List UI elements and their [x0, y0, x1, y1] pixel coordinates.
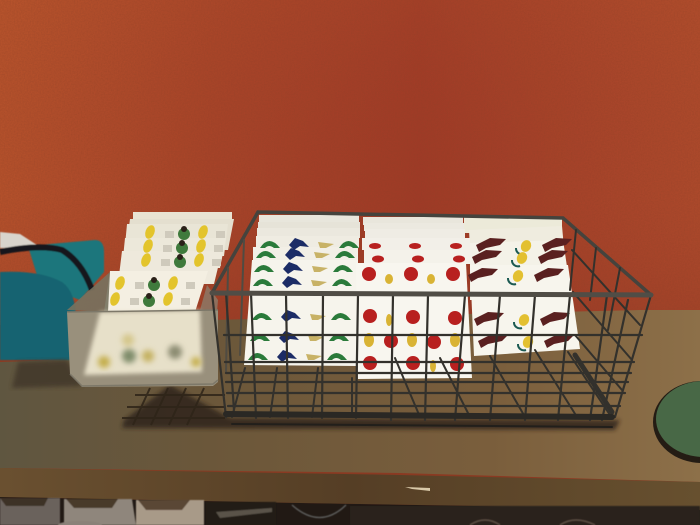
green packets: [244, 215, 360, 366]
basket front rim: [212, 293, 651, 295]
yellow packets in clear box: [104, 212, 234, 312]
cups: [0, 498, 204, 525]
coaster: [653, 381, 700, 463]
basket grid shadow: [122, 388, 225, 425]
basket front grid: [212, 293, 651, 420]
wall: [0, 0, 700, 325]
table top: [0, 310, 700, 482]
table scratch: [405, 487, 430, 491]
red packets: [356, 217, 472, 379]
shelf below the table: [0, 497, 700, 525]
basket shadow on table: [122, 385, 620, 430]
glasses: [206, 502, 700, 525]
basket floor rails: [232, 350, 610, 417]
table front lip: [0, 468, 700, 510]
basket bottom rail: [226, 414, 612, 417]
box shadow on table: [12, 360, 82, 388]
bag: [0, 232, 104, 360]
clear box: [67, 272, 218, 387]
basket right side wires: [570, 230, 640, 390]
basket back and side rims: [212, 212, 651, 295]
basket left side wires: [226, 240, 244, 372]
wire basket: [212, 212, 651, 427]
brown packets: [464, 217, 580, 356]
